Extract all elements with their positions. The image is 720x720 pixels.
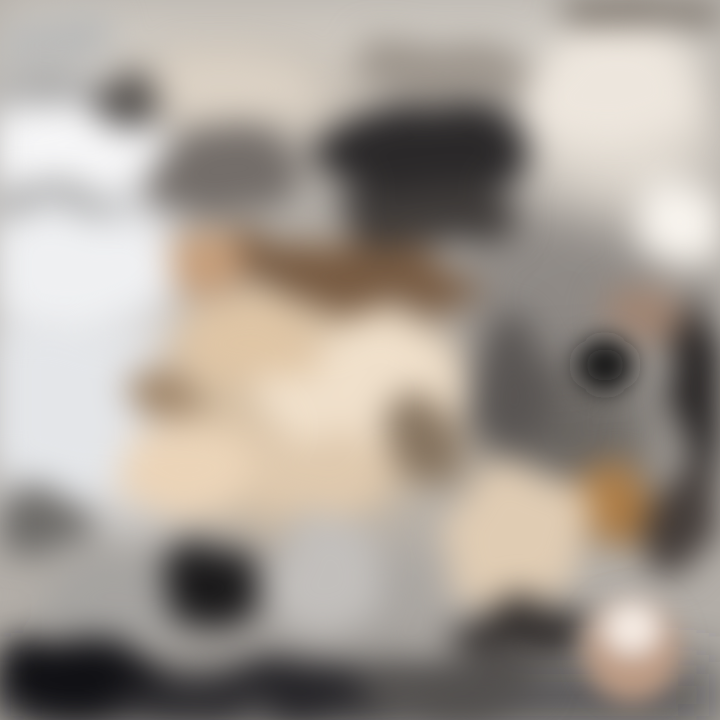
left white bands: [0, 14, 200, 640]
lower shapes: [0, 460, 590, 720]
small dark spot: [577, 339, 633, 391]
dark centre cloud: [97, 46, 550, 251]
bright orb: [584, 598, 680, 702]
brown band and cream mass: [115, 219, 483, 516]
right side highlights and darks: [472, 0, 720, 582]
